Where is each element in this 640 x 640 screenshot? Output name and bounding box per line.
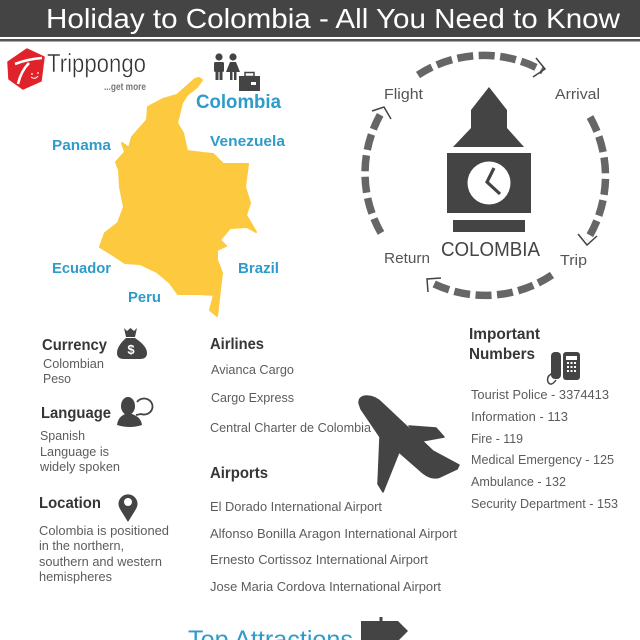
panel: language: widely spoken xyxy=(39,459,120,474)
panel: airports: Jose Maria Cordova International Airport xyxy=(210,579,441,594)
panel: location xyxy=(39,494,169,584)
panel: important numbers: Tourist Police - 3374413 xyxy=(471,387,609,402)
panel: language xyxy=(39,397,153,474)
panel: important numbers: Numbers xyxy=(469,346,535,363)
journey cycle ring xyxy=(365,55,605,295)
panel: important numbers: Important xyxy=(469,326,540,343)
panel: airlines: Avianca Cargo xyxy=(211,362,294,377)
panel: important numbers xyxy=(469,326,618,511)
panel: airlines: Airlines xyxy=(210,336,264,353)
map labels: Peru xyxy=(128,289,161,306)
cycle labels: Flight xyxy=(384,86,424,103)
panel: important numbers: Security Department - 153 xyxy=(471,496,618,511)
logo: Trippongo: ...get more xyxy=(104,82,146,93)
panel: airports: Ernesto Cortissoz International Airport xyxy=(210,552,428,567)
panel: language: Language is xyxy=(40,444,109,459)
title banner: Holiday to Colombia - All You Need to Know xyxy=(46,3,620,34)
panel: important numbers: Fire - 119 xyxy=(471,431,523,446)
map labels xyxy=(52,92,286,306)
panel: location: Colombia is positioned xyxy=(39,523,169,538)
panel: airlines: Central Charter de Colombia xyxy=(210,420,372,435)
icon: signpost xyxy=(361,617,408,640)
cycle labels xyxy=(384,86,600,269)
panel: airlines: Cargo Express xyxy=(211,390,294,405)
panel: location: Location xyxy=(39,495,101,512)
icon: airplane xyxy=(359,396,459,492)
icon: map pin xyxy=(118,494,138,522)
panel: currency xyxy=(42,328,147,386)
cycle labels: COLOMBIA xyxy=(441,239,541,261)
panel: important numbers: Medical Emergency - 125 xyxy=(471,452,614,467)
panel: location: hemispheres xyxy=(39,569,112,584)
title banner xyxy=(0,0,640,42)
icon: money bag: $ xyxy=(127,342,135,357)
map labels: Colombia xyxy=(196,92,281,113)
panel: currency: Peso xyxy=(43,371,71,386)
panel: location: southern and western xyxy=(39,554,162,569)
map labels: Panama xyxy=(52,137,112,154)
cycle labels: Trip xyxy=(560,252,587,269)
panel: language: Language xyxy=(41,405,111,422)
panel: location: in the northern, xyxy=(39,538,124,553)
panel: airports: El Dorado International Airport xyxy=(210,499,382,514)
cycle labels: Arrival xyxy=(555,86,600,103)
map of Colombia xyxy=(100,78,256,316)
logo: Trippongo: Trippongo xyxy=(47,48,146,78)
panel: important numbers: Ambulance - 132 xyxy=(471,474,566,489)
logo: Trippongo xyxy=(8,48,146,93)
panel: language: Spanish xyxy=(40,428,85,443)
panel: airports xyxy=(210,465,457,594)
panel: airlines xyxy=(210,336,372,435)
panel: important numbers: Information - 113 xyxy=(471,409,568,424)
panel: currency: Colombian xyxy=(43,356,104,371)
icon: telephone xyxy=(548,352,580,384)
panel: currency: Currency xyxy=(42,337,107,354)
panel: airports: Alfonso Bonilla Aragon International Airport xyxy=(210,526,457,541)
map labels: Ecuador xyxy=(52,260,111,277)
map labels: Venezuela xyxy=(210,133,286,150)
icon: couple with suitcase xyxy=(214,53,260,91)
cycle labels: Return xyxy=(384,250,430,267)
map labels: Brazil xyxy=(238,260,279,277)
icon: speaking person xyxy=(117,397,153,427)
panel: airports: Airports xyxy=(210,465,268,482)
icon: clock tower xyxy=(447,87,531,232)
